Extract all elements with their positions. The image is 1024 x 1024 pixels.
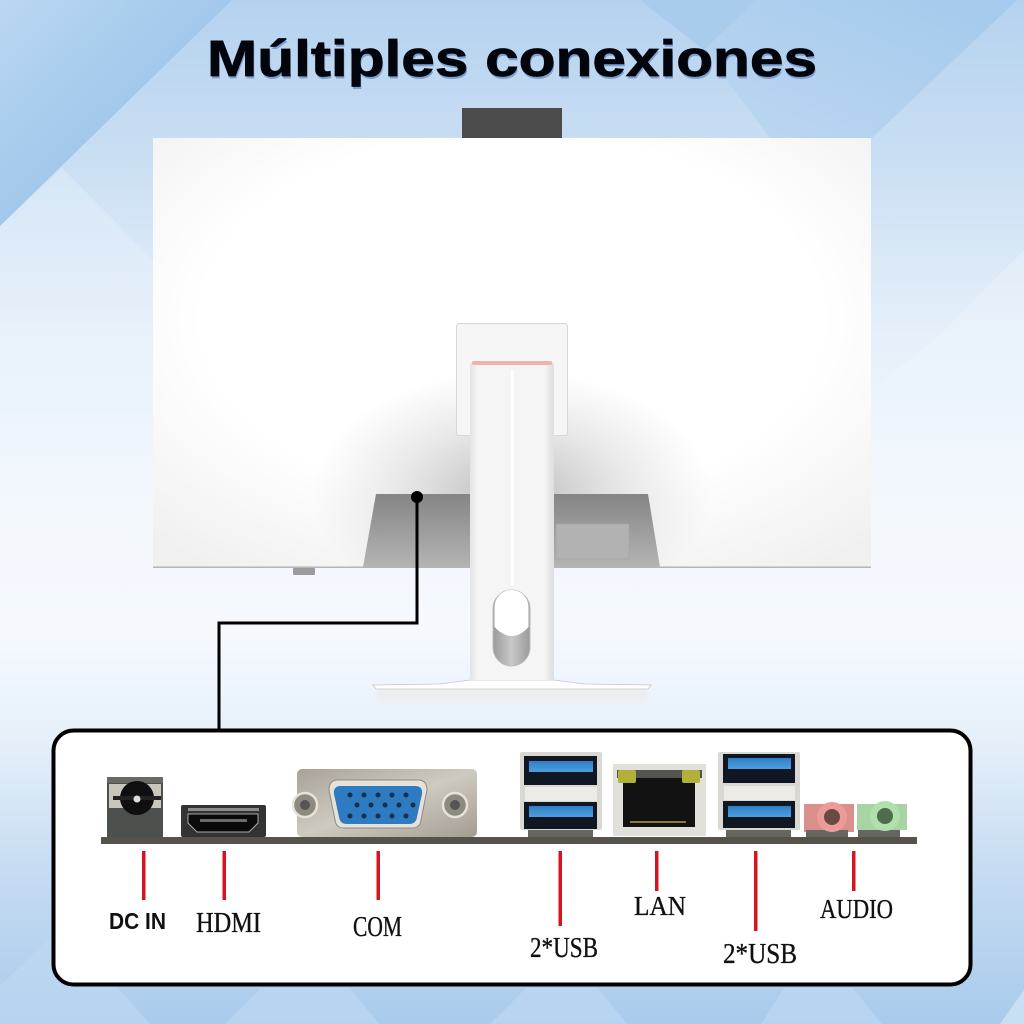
title: Múltiples conexiones <box>207 30 817 87</box>
red indicator lines <box>142 851 856 931</box>
cable hole <box>493 590 530 666</box>
port: HDMI <box>181 805 266 837</box>
monitor back panel <box>153 138 871 568</box>
label: HDMI: HDMI <box>196 908 261 939</box>
label: 2*USB left: 2*USB <box>530 933 598 964</box>
power button <box>293 568 315 575</box>
port: DC IN <box>107 777 163 837</box>
port: audio green <box>857 801 907 837</box>
monitor rear view <box>153 108 871 702</box>
title: Múltiples conexiones <box>208 32 818 90</box>
label: COM: COM <box>353 912 402 943</box>
port: LAN <box>613 764 706 836</box>
port: audio pink <box>804 802 854 837</box>
stand base <box>373 680 651 702</box>
label: AUDIO: AUDIO <box>820 894 893 924</box>
VESA mount plate <box>456 324 568 436</box>
label: LAN: LAN <box>634 891 686 921</box>
panel: ports <box>54 730 970 984</box>
label: 2*USB right: 2*USB <box>723 939 797 970</box>
stand neck <box>470 361 554 680</box>
port: COM <box>293 769 477 837</box>
highlight line <box>511 370 514 586</box>
port: USB pair left <box>520 752 602 837</box>
board strip <box>101 837 917 844</box>
port: USB pair right <box>718 752 800 837</box>
accent strip <box>472 361 552 365</box>
label: DC IN: DC IN <box>109 908 166 934</box>
vent trapezoid <box>363 494 660 567</box>
connector leader line <box>219 491 423 730</box>
webcam module <box>462 108 562 139</box>
